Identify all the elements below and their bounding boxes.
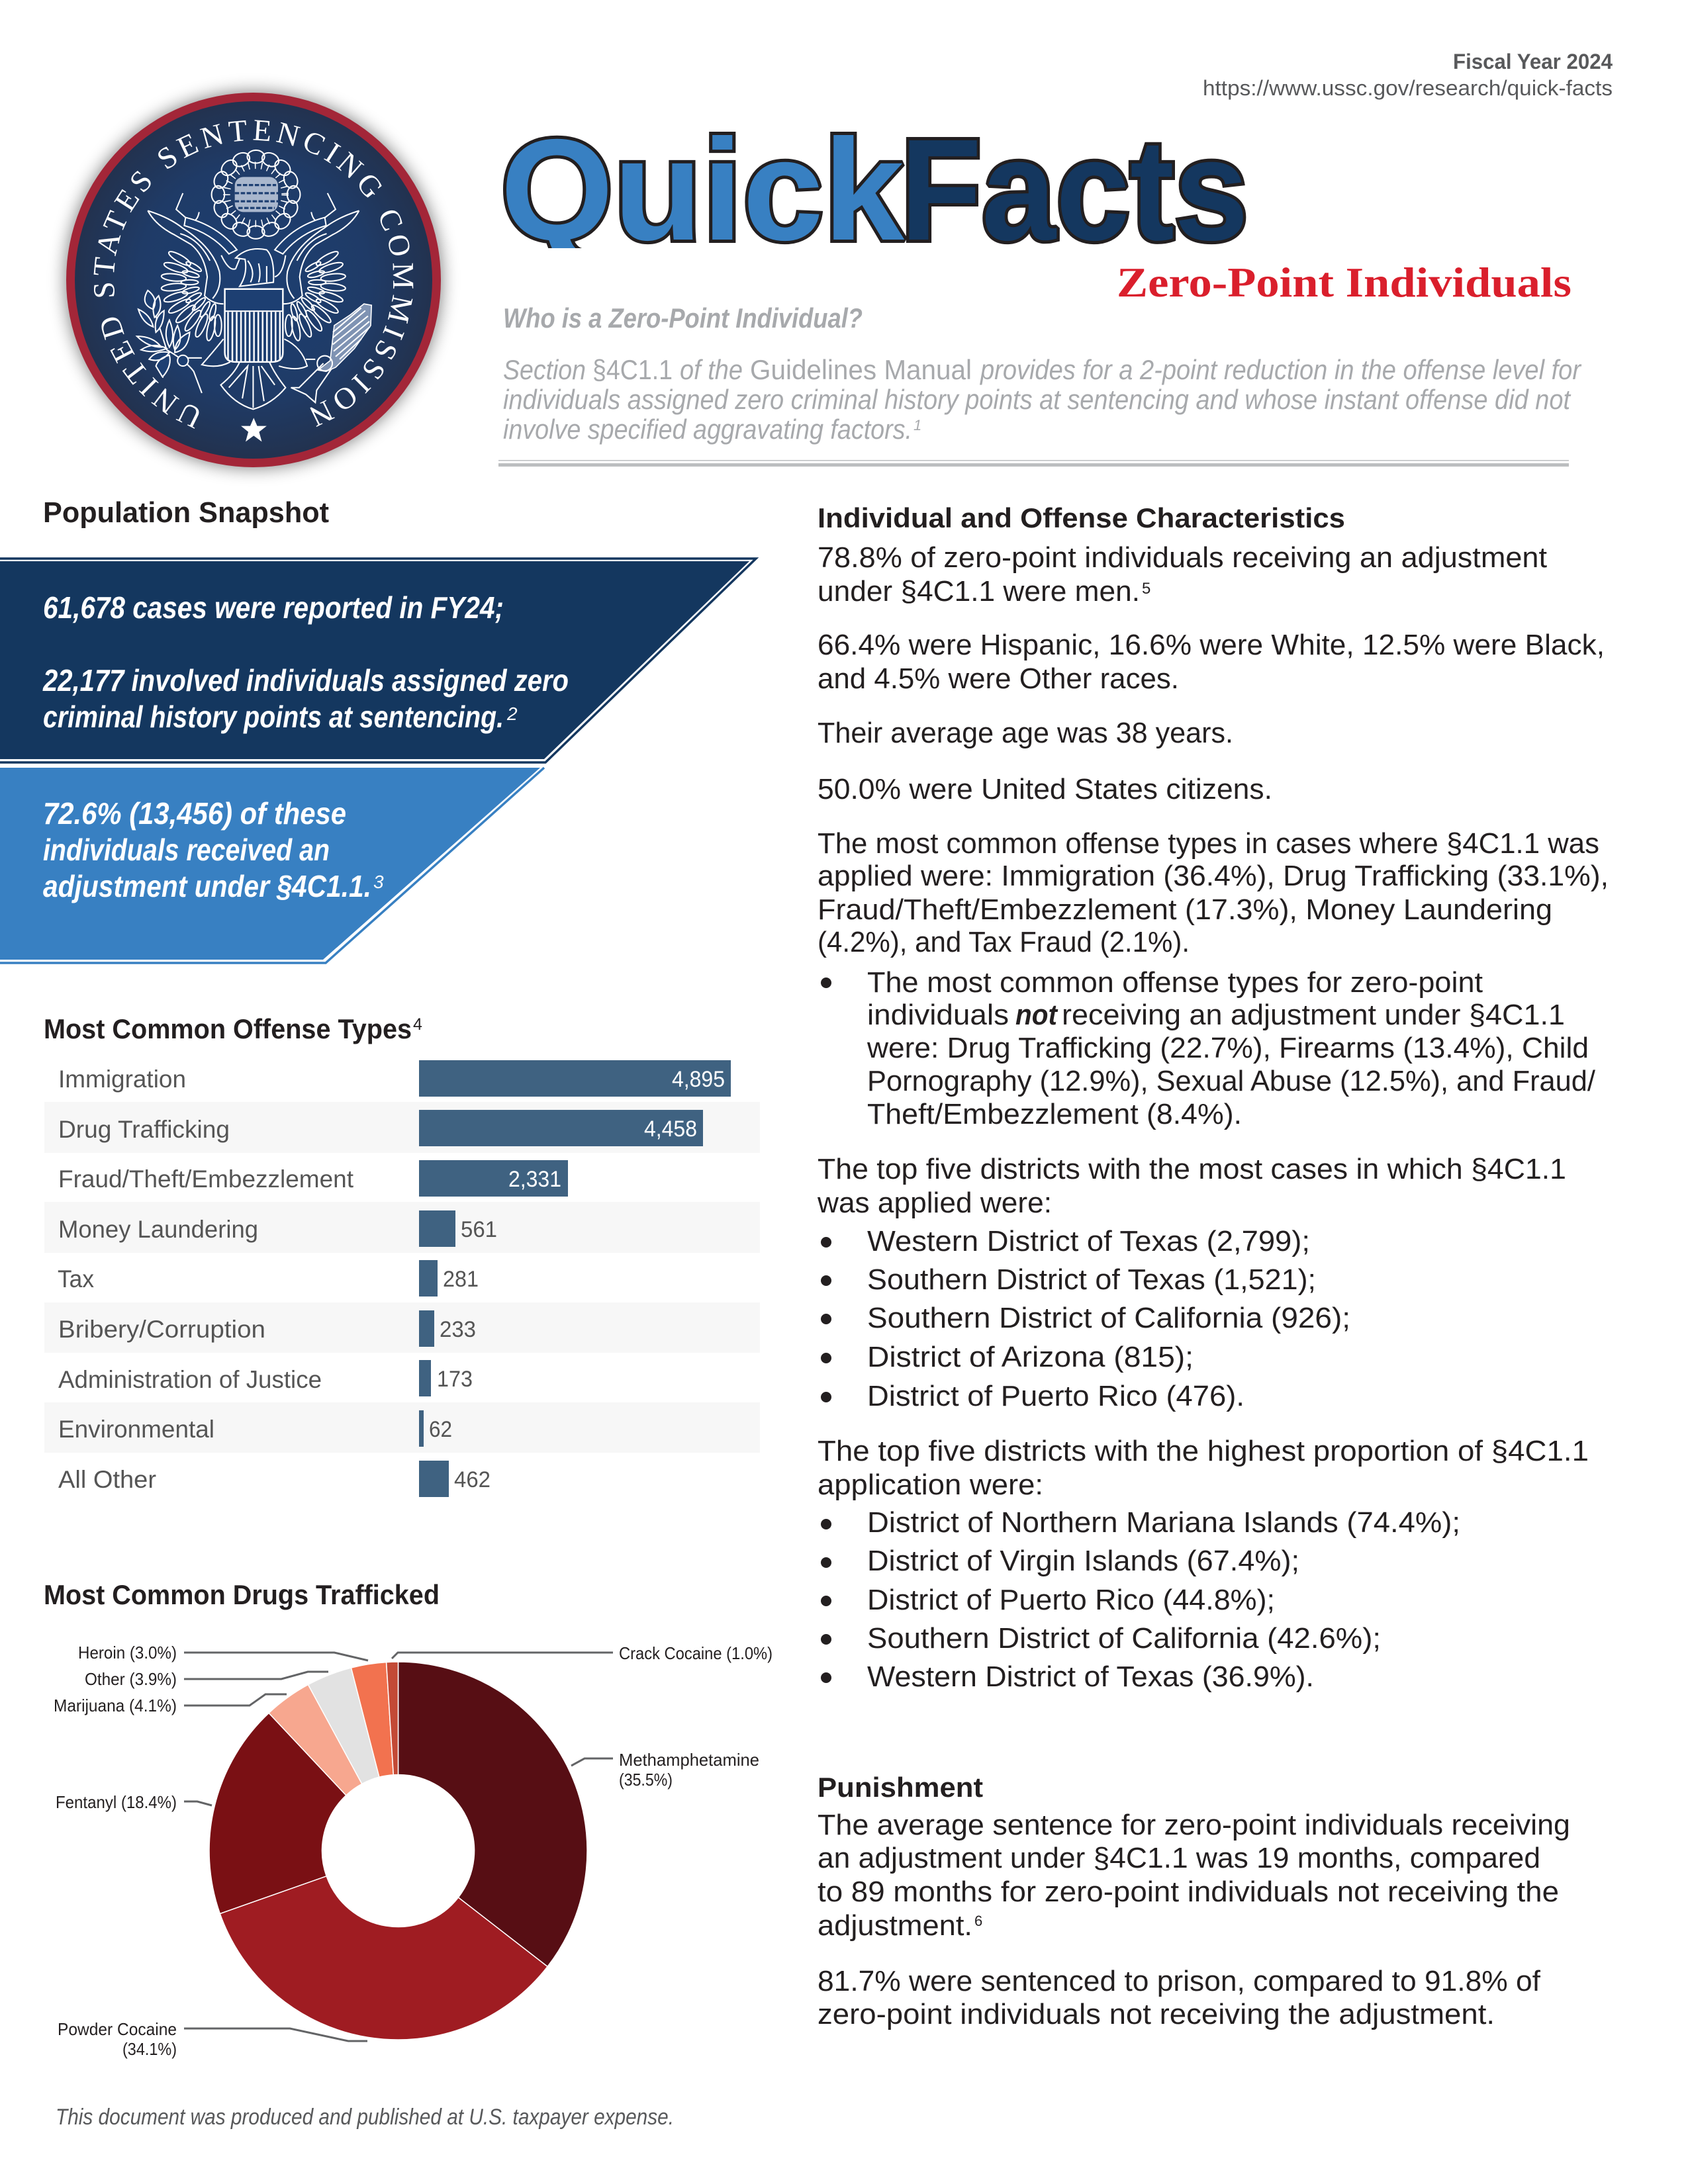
intro definition text: individuals assigned zero criminal history points at sentencing and whose instant offense did not bbox=[503, 384, 1571, 415]
bar: Money Laundering bbox=[58, 1210, 497, 1247]
subtitle: Zero-Point Individuals: Zero-Point Individuals bbox=[1117, 259, 1571, 306]
heading: Most Common Offense Types: 4 bbox=[413, 1015, 422, 1034]
panel: received adjustment banner: 72.6% (13,456) of these bbox=[43, 796, 346, 831]
panel: received adjustment banner bbox=[0, 768, 544, 963]
bar: All Other: All Other bbox=[58, 1466, 156, 1493]
bar: Administration of Justice bbox=[58, 1360, 473, 1396]
list: top districts by proportion: District of Puerto Rico (44.8%); bbox=[867, 1584, 1275, 1616]
bullet: offense types without adjustment: individuals bbox=[867, 999, 1009, 1031]
bar: All Other bbox=[58, 1461, 491, 1497]
text: gender: 5 bbox=[1142, 580, 1150, 598]
bar: Bribery/Corruption: Bribery/Corruption bbox=[58, 1316, 265, 1343]
text: top districts by cases intro: The top five districts with the most cases in which §4C1.1 bbox=[818, 1153, 1566, 1185]
heading: Most Common Offense Types: Most Common Offense Types bbox=[44, 1013, 412, 1044]
header: website url: https://www.ussc.gov/research/quick-facts bbox=[1203, 76, 1613, 100]
intro definition text: 1 bbox=[914, 417, 921, 433]
bar: Money Laundering: Money Laundering bbox=[58, 1216, 258, 1243]
text: average sentence: adjustment. bbox=[818, 1909, 972, 1942]
text: citizenship: 50.0% were United States citizens. bbox=[818, 773, 1272, 805]
text: top districts by proportion intro bbox=[818, 1435, 1589, 1501]
text: offense types bbox=[818, 827, 1609, 958]
bar: Fraud/Theft/Embezzlement bbox=[58, 1160, 568, 1197]
intro definition text: involve specified aggravating factors. bbox=[503, 414, 912, 445]
bar chart: offense types bbox=[44, 1060, 760, 1497]
icon: commission seal: UNITED STATES SENTENCING COMMISSION bbox=[94, 120, 413, 429]
list: top districts by proportion: District of Northern Mariana Islands (74.4%); bbox=[867, 1506, 1460, 1539]
list: top districts by cases: Southern District of Texas (1,521); bbox=[867, 1263, 1316, 1296]
panel: cases reported banner: 2 bbox=[506, 704, 518, 724]
panel: cases reported banner: 61,678 cases were reported in FY24; bbox=[43, 590, 504, 625]
intro definition text: Guidelines Manual bbox=[750, 354, 972, 385]
text: average sentence bbox=[818, 1809, 1570, 1942]
bar: Immigration: 4,895 bbox=[672, 1067, 725, 1092]
label: Other: Other (3.9%) bbox=[85, 1669, 177, 1689]
panel: cases reported banner: 22,177 involved individuals assigned zero bbox=[42, 663, 569, 698]
bar: Tax bbox=[58, 1260, 479, 1297]
list: top districts by cases bbox=[821, 1225, 1350, 1412]
text: prison rate bbox=[818, 1965, 1541, 2030]
title: QuickFacts bbox=[503, 132, 1246, 248]
heading: Most Common Drugs Trafficked: Most Common Drugs Trafficked bbox=[44, 1579, 440, 1610]
list: top districts by cases: District of Arizona (815); bbox=[867, 1341, 1194, 1373]
text: average sentence: 6 bbox=[974, 1913, 982, 1929]
heading: Punishment: Punishment bbox=[818, 1772, 983, 1803]
text: top districts by cases intro: was applied were: bbox=[817, 1187, 1052, 1219]
bullet: offense types without adjustment bbox=[821, 966, 1596, 1130]
bar: Administration of Justice: 173 bbox=[437, 1367, 473, 1392]
label: Powder Cocaine: (34.1%) bbox=[122, 2039, 177, 2059]
text: race: 66.4% were Hispanic, 16.6% were White, 12.5% were Black, bbox=[818, 629, 1605, 661]
label: Marijuana: Marijuana (4.1%) bbox=[54, 1696, 177, 1715]
panel: received adjustment banner: 3 bbox=[373, 872, 384, 892]
bar: Environmental bbox=[58, 1410, 452, 1447]
icon: commission seal bbox=[54, 80, 453, 480]
label: Marijuana bbox=[54, 1694, 287, 1715]
bullet: offense types without adjustment: receiving an adjustment under §4C1.1 bbox=[1062, 999, 1565, 1031]
list: top districts by cases: Western District of Texas (2,799); bbox=[867, 1225, 1310, 1257]
text: gender: under §4C1.1 were men. bbox=[818, 575, 1140, 608]
text: gender bbox=[818, 541, 1547, 608]
bar: Drug Trafficking: Drug Trafficking bbox=[58, 1116, 230, 1143]
slice: Fentanyl bbox=[209, 1713, 346, 1914]
label: Powder Cocaine: Powder Cocaine bbox=[58, 2019, 177, 2039]
list: top districts by cases: District of Puerto Rico (476). bbox=[867, 1380, 1244, 1412]
label: Fentanyl: Fentanyl (18.4%) bbox=[56, 1792, 177, 1812]
label: Heroin bbox=[78, 1643, 368, 1662]
text: top districts by proportion intro: The top five districts with the highest proportion of §4C1.1 bbox=[818, 1435, 1589, 1467]
text: prison rate: zero-point individuals not receiving the adjustment. bbox=[818, 1998, 1495, 2030]
slice: Heroin bbox=[351, 1662, 393, 1777]
label: Powder Cocaine bbox=[58, 2019, 367, 2059]
slice: Other bbox=[308, 1668, 379, 1784]
slice: Crack Cocaine bbox=[387, 1662, 399, 1775]
bar: Immigration: Immigration bbox=[58, 1066, 186, 1093]
bar: Tax: Tax bbox=[58, 1265, 94, 1293]
panel: cases reported banner bbox=[0, 559, 756, 762]
title: QuickFacts: Facts bbox=[900, 110, 1248, 271]
intro definition text: of the bbox=[680, 354, 743, 385]
text: average sentence: to 89 months for zero-point individuals not receiving the bbox=[818, 1876, 1559, 1908]
heading: Population Snapshot: Population Snapshot bbox=[43, 496, 329, 529]
text: prison rate: 81.7% were sentenced to prison, compared to 91.8% of bbox=[818, 1965, 1541, 1997]
bar: Drug Trafficking: 4,458 bbox=[644, 1116, 697, 1142]
text: offense types: applied were: Immigration (36.4%), Drug Trafficking (33.1%), bbox=[818, 860, 1609, 892]
bar: Environmental: Environmental bbox=[58, 1416, 214, 1443]
bar: Environmental: 62 bbox=[429, 1417, 452, 1442]
slice: Powder Cocaine bbox=[220, 1876, 547, 2040]
bullet: offense types without adjustment: Pornography (12.9%), Sexual Abuse (12.5%), and Fraud/ bbox=[867, 1065, 1596, 1097]
bar: Money Laundering: 561 bbox=[461, 1217, 497, 1242]
list: top districts by proportion: District of Virgin Islands (67.4%); bbox=[867, 1545, 1299, 1577]
text: gender: 78.8% of zero-point individuals receiving an adjustment bbox=[818, 541, 1547, 574]
label: Crack Cocaine bbox=[392, 1643, 773, 1663]
label: Methamphetamine: Methamphetamine bbox=[619, 1750, 759, 1770]
list: top districts by proportion: Southern District of California (42.6%); bbox=[867, 1622, 1381, 1655]
footer note: This document was produced and published at U.S. taxpayer expense. bbox=[56, 2105, 674, 2130]
text: race: and 4.5% were Other races. bbox=[818, 662, 1179, 695]
slice: Methamphetamine bbox=[399, 1662, 587, 1967]
bullet: offense types without adjustment: Theft/Embezzlement (8.4%). bbox=[867, 1098, 1242, 1130]
text: offense types: (4.2%), and Tax Fraud (2.1%). bbox=[818, 926, 1190, 958]
text: average sentence: an adjustment under §4C1.1 was 19 months, compared bbox=[818, 1842, 1540, 1874]
heading: Individual and Offense Characteristics: Individual and Offense Characteristics bbox=[818, 502, 1345, 533]
header: fiscal year: Fiscal Year 2024 bbox=[1453, 50, 1613, 73]
list: top districts by proportion: Western District of Texas (36.9%). bbox=[867, 1661, 1314, 1693]
bar: Fraud/Theft/Embezzlement: 2,331 bbox=[508, 1167, 561, 1192]
bar: All Other: 462 bbox=[454, 1467, 491, 1492]
label: Crack Cocaine: Crack Cocaine (1.0%) bbox=[619, 1643, 773, 1663]
text: race bbox=[818, 629, 1605, 695]
title: QuickFacts: Quick bbox=[500, 110, 905, 271]
intro definition text: §4C1.1 bbox=[592, 354, 673, 385]
panel: cases reported banner: criminal history points at sentencing. bbox=[43, 700, 504, 734]
intro question: Who is a Zero-Point Individual? bbox=[503, 302, 863, 334]
bar: Fraud/Theft/Embezzlement: Fraud/Theft/Embezzlement bbox=[58, 1165, 354, 1193]
text: top districts by proportion intro: application were: bbox=[818, 1469, 1043, 1501]
text: average sentence: The average sentence for zero-point individuals receiving bbox=[818, 1809, 1570, 1841]
intro definition text: provides for a 2-point reduction in the offense level for bbox=[979, 354, 1582, 385]
bullet: offense types without adjustment: not bbox=[1015, 999, 1058, 1031]
panel: received adjustment banner: adjustment under §4C1.1. bbox=[43, 869, 371, 903]
text: top districts by cases intro bbox=[817, 1153, 1566, 1219]
text: offense types: The most common offense types in cases where §4C1.1 was bbox=[818, 827, 1599, 860]
list: top districts by proportion bbox=[821, 1506, 1460, 1693]
donut chart: drugs trafficked bbox=[209, 1662, 587, 2040]
bar: Bribery/Corruption bbox=[58, 1310, 476, 1347]
label: Methamphetamine bbox=[571, 1750, 759, 1790]
bullet: offense types without adjustment: The most common offense types for zero-point bbox=[867, 966, 1483, 999]
slice: Marijuana bbox=[269, 1685, 362, 1796]
bar: Administration of Justice: Administration of Justice bbox=[58, 1366, 322, 1393]
label: Other bbox=[85, 1669, 328, 1689]
label: Methamphetamine: (35.5%) bbox=[619, 1770, 673, 1790]
list: top districts by cases: Southern District of California (926); bbox=[867, 1302, 1350, 1334]
panel: received adjustment banner: individuals received an bbox=[43, 833, 330, 867]
bar: Tax: 281 bbox=[443, 1267, 479, 1292]
bar: Immigration bbox=[58, 1060, 731, 1097]
bar: Drug Trafficking bbox=[58, 1110, 703, 1146]
bar: Bribery/Corruption: 233 bbox=[440, 1317, 476, 1342]
intro definition text: Section bbox=[503, 354, 586, 385]
text: offense types: Fraud/Theft/Embezzlement (17.3%), Money Laundering bbox=[818, 893, 1552, 926]
intro definition text bbox=[503, 354, 1582, 445]
text: average age: Their average age was 38 years. bbox=[818, 717, 1233, 749]
label: Heroin: Heroin (3.0%) bbox=[78, 1643, 177, 1662]
bullet: offense types without adjustment: were: Drug Trafficking (22.7%), Firearms (13.4%), Child bbox=[867, 1032, 1589, 1064]
